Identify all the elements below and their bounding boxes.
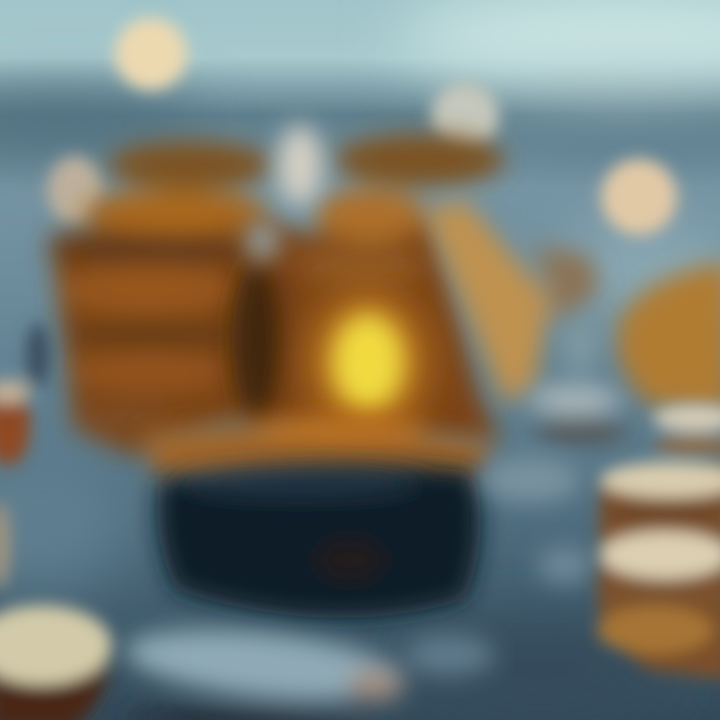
bokeh lights [47,18,677,235]
left coin stack [45,141,300,455]
right coin stack [597,404,720,680]
central coin stack [232,134,505,440]
glowing yellow light [308,290,428,434]
tilted golden coin [425,200,600,405]
foreground left coin [0,605,112,720]
foreground pale dish [120,619,408,720]
steam wisps [244,125,322,262]
right large coin [617,262,720,410]
dark navy pouch [157,463,481,618]
small scattered coins right of centre [405,317,628,675]
coin ledge above dark pouch [140,416,495,480]
left edge coin [0,323,50,589]
